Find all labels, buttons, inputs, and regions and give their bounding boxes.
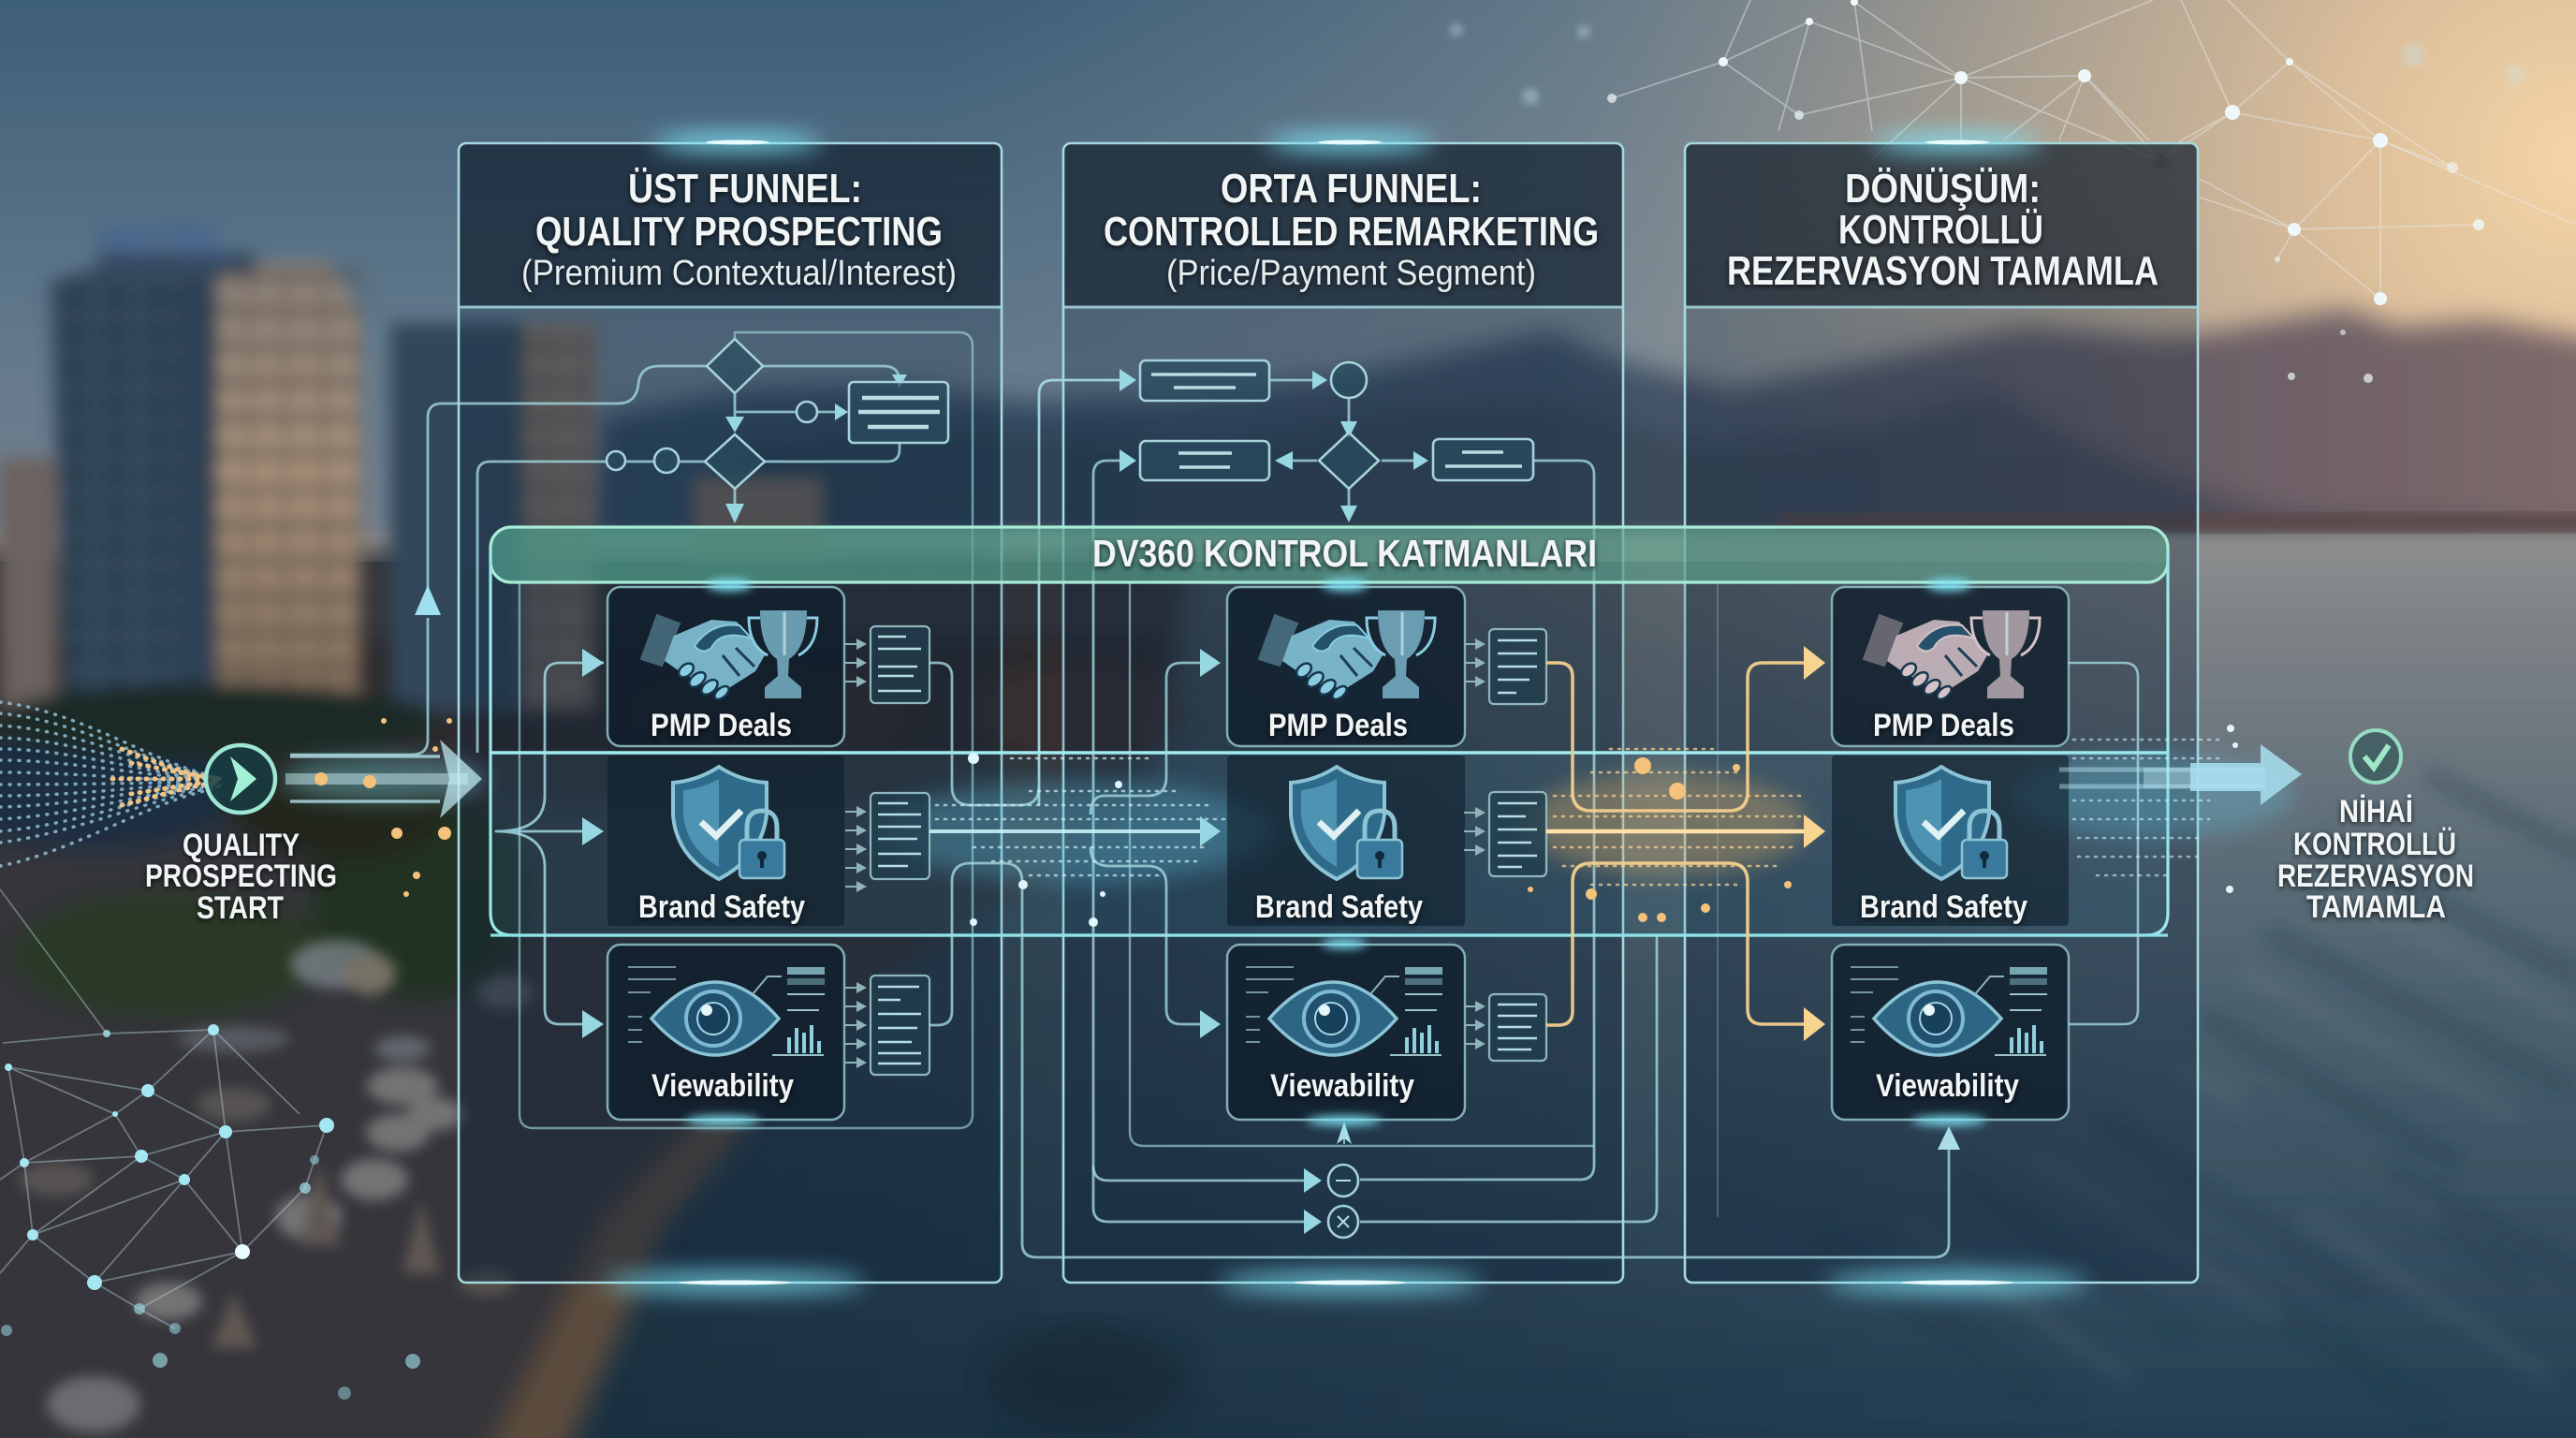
card: pmp deals, dönüşüm — [1832, 587, 2069, 746]
final label: TAMAMLA — [2306, 889, 2446, 925]
glow behind flows — [281, 754, 2293, 883]
heading: dönüşüm: DÖNÜŞÜM: — [1845, 166, 2041, 212]
connectors: stage one fan-in — [290, 585, 604, 1038]
node — [1328, 1206, 1358, 1238]
panel header — [1063, 143, 1623, 307]
icon: handshake and trophy — [641, 610, 817, 702]
label: Brand Safety — [1860, 889, 2027, 925]
start label — [145, 828, 337, 926]
heading: dönüşüm — [1727, 166, 2159, 294]
final label: REZERVASYON — [2277, 858, 2474, 894]
icon: shield and lock — [673, 767, 784, 879]
label: Viewability — [651, 1068, 794, 1104]
icon: play chevron — [230, 756, 256, 801]
label: PMP Deals — [1873, 708, 2014, 743]
panel: dönüşüm — [1685, 143, 2198, 1283]
connectors: üst funnel to orta funnel — [929, 649, 1960, 1257]
data particle streams — [0, 702, 2238, 927]
connectors: orta funnel to dönüşüm — [1546, 646, 2138, 1041]
process box one — [1140, 360, 1269, 401]
control layer frame lines — [490, 552, 2168, 1217]
final label: NİHAİ — [2339, 794, 2413, 829]
label: Viewability — [1270, 1068, 1414, 1104]
label: Viewability — [1876, 1068, 2019, 1104]
label: PMP Deals — [651, 708, 792, 743]
process box two — [1140, 441, 1269, 480]
dv360 band — [490, 527, 2168, 582]
final node — [2277, 730, 2474, 925]
dv360 outer layer frame — [490, 562, 2168, 935]
sky — [0, 0, 2576, 655]
beach and palm shore — [0, 552, 1189, 1438]
flowchart: üst funnel — [428, 332, 973, 1128]
icon: handshake and trophy — [1259, 610, 1435, 702]
card: brand safety, üst funnel — [607, 756, 844, 926]
dark shoal — [983, 1325, 1189, 1437]
panel header — [459, 143, 1002, 307]
output documents: orta funnel — [1464, 629, 1546, 1061]
arrow: up — [415, 585, 441, 615]
sea — [0, 513, 2576, 1438]
waves — [1825, 777, 2576, 1414]
card: viewability, dönüşüm — [1832, 945, 2069, 1120]
decision node — [1331, 362, 1367, 398]
panel: üst funnel — [459, 143, 1002, 1283]
heading: orta funnel: CONTROLLED REMARKETING — [1104, 209, 1599, 255]
card: viewability, orta funnel — [1227, 945, 1465, 1120]
panel header — [1685, 143, 2198, 307]
heading: orta funnel: (Price/Payment Segment) — [1166, 254, 1536, 293]
card: brand safety, dönüşüm — [1832, 756, 2069, 926]
edge glows on cards — [685, 580, 1986, 1125]
panel edge glows — [604, 134, 2088, 1294]
beach umbrellas — [19, 940, 534, 1432]
heading: üst funnel: QUALITY PROSPECTING — [535, 209, 943, 255]
start label: PROSPECTING — [145, 858, 337, 894]
icon: shield and lock — [1291, 767, 1402, 879]
final label: KONTROLLÜ — [2293, 827, 2456, 862]
start node — [145, 745, 337, 926]
heading: dönüşüm: KONTROLLÜ — [1838, 207, 2043, 253]
card: pmp deals, üst funnel — [607, 587, 844, 746]
card: viewability, üst funnel — [607, 945, 844, 1120]
panel: orta funnel — [1063, 143, 1623, 1283]
start label: START — [197, 890, 284, 926]
distant mountains — [580, 309, 2576, 599]
hotel sign: HOTEL — [97, 216, 230, 266]
icon: eye with metrics — [1851, 967, 2047, 1055]
output documents: üst funnel — [845, 626, 929, 1075]
flowchart: orta funnel — [1039, 360, 1594, 1208]
label: PMP Deals — [1268, 708, 1408, 743]
heading: üst funnel — [521, 166, 957, 293]
decision diamond — [1319, 433, 1379, 489]
icon: handshake and trophy — [1864, 610, 2040, 702]
decision diamond two — [705, 434, 765, 489]
icon: shield and lock — [1895, 767, 2007, 879]
icon: eye with metrics — [1246, 967, 1442, 1055]
icon: check — [2364, 745, 2389, 768]
exit arrow — [2059, 744, 2302, 805]
label: Brand Safety — [1255, 889, 1423, 925]
heading: dönüşüm: REZERVASYON TAMAMLA — [1727, 248, 2159, 294]
process box — [849, 382, 948, 443]
node — [1328, 1165, 1358, 1196]
decision diamond one — [707, 339, 763, 393]
start label: QUALITY — [183, 828, 300, 863]
card: pmp deals, orta funnel — [1227, 587, 1465, 746]
heading: orta funnel: ORTA FUNNEL: — [1221, 166, 1482, 212]
heading: üst funnel: ÜST FUNNEL: — [628, 166, 862, 212]
card: brand safety, orta funnel — [1227, 756, 1465, 926]
heading: üst funnel: (Premium Contextual/Interest) — [521, 254, 957, 293]
hotel buildings — [0, 216, 824, 758]
label: Brand Safety — [638, 889, 805, 925]
process box three — [1433, 439, 1533, 480]
network nodes bottom left — [0, 889, 420, 1400]
start arrow — [285, 740, 482, 818]
final label — [2277, 794, 2474, 925]
band title: DV360 KONTROL KATMANLARI — [1092, 532, 1597, 575]
network nodes top right — [1450, 0, 2576, 383]
node circles — [607, 402, 817, 473]
icon: eye with metrics — [628, 967, 825, 1055]
heading: orta funnel — [1104, 166, 1599, 293]
